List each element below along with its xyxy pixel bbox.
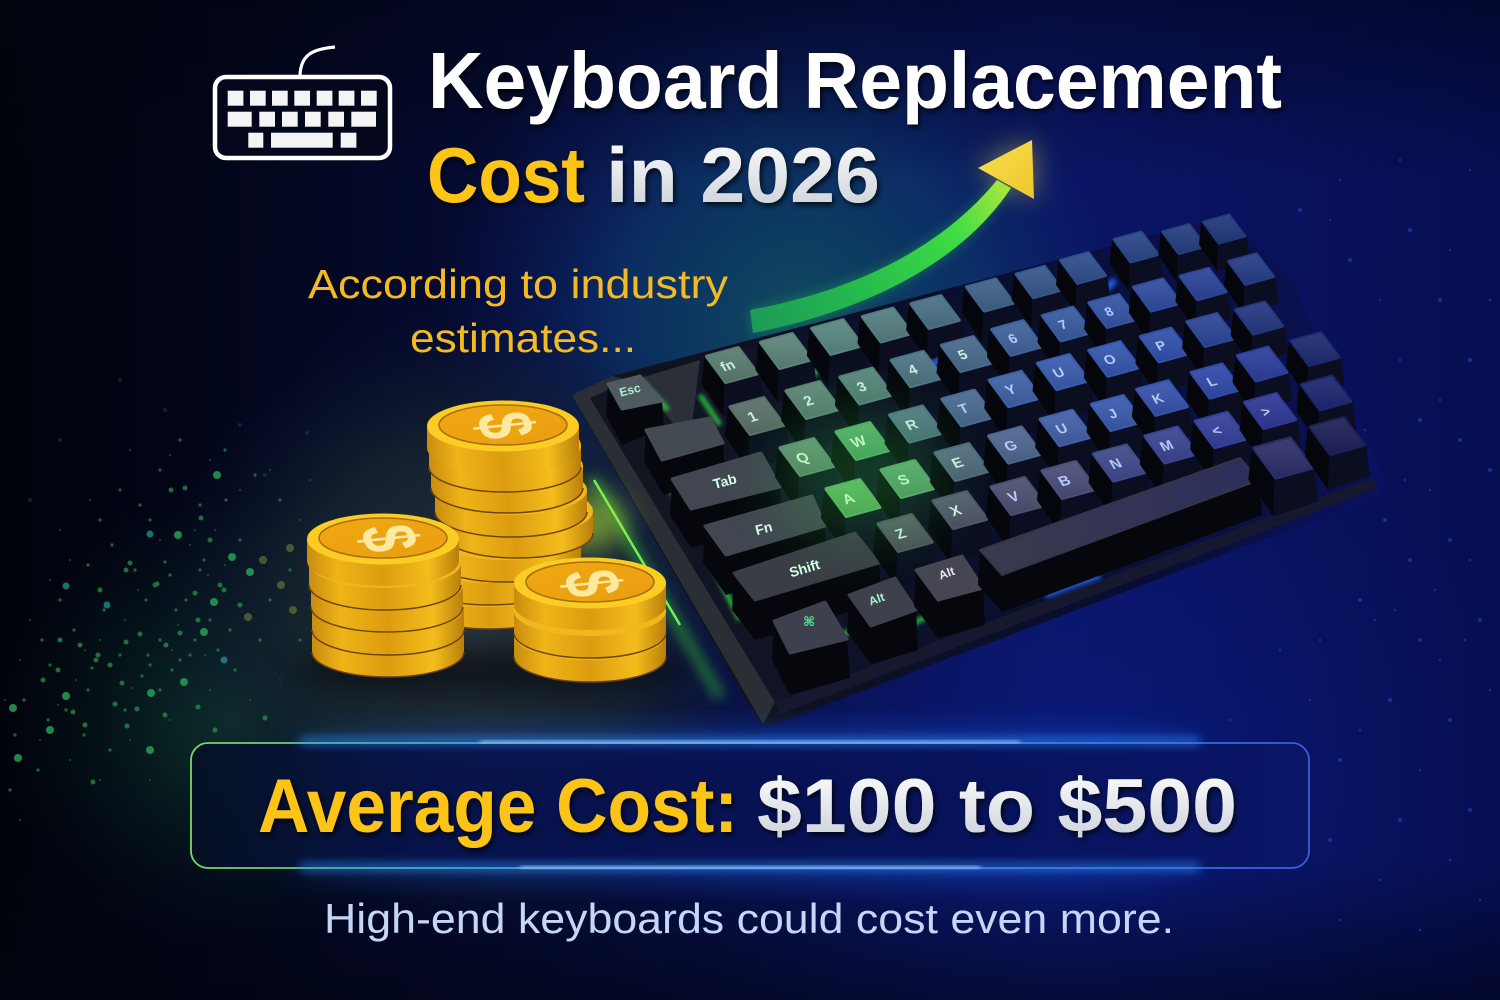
keys: upper letter row: W [848, 434, 871, 451]
coin stack: right [514, 558, 666, 682]
panel: average cost banner [191, 727, 1309, 882]
keys: upper letter row: P [1153, 338, 1169, 353]
keys: lower letter row: N [1107, 456, 1125, 473]
keys: upper letter row [670, 301, 1288, 548]
keys: lower letter row [732, 375, 1356, 640]
keys: home row: L [1203, 373, 1220, 389]
coin stack: left [307, 514, 464, 677]
keys: function row: Esc [618, 381, 642, 400]
average cost value: Average Cost: [258, 764, 738, 849]
subtitle: according to industry estimates: According to industry [308, 261, 729, 307]
keys: lower letter row: Z [893, 526, 909, 543]
keys: number row: 3 [854, 379, 870, 395]
keys: home row: S [895, 472, 913, 489]
average cost value: $100 to $500 [757, 764, 1237, 849]
keys: number row: 4 [905, 362, 921, 378]
keyboard green key glow [775, 410, 945, 540]
keys: bottom row: ⌘ [803, 614, 815, 629]
coin stack: right: $ [546, 566, 639, 601]
keys: home row: A [840, 491, 858, 508]
subtitle: according to industry estimates: estimates... [410, 315, 636, 361]
keys: home row: K [1149, 390, 1167, 407]
coins [290, 400, 690, 692]
keys: number row: 1 [745, 410, 761, 426]
keys: home row: J [1105, 406, 1120, 421]
title: Cost [427, 131, 585, 219]
green particles [5, 440, 310, 820]
keys: number row [644, 253, 1279, 495]
keyboard backlight glow [592, 280, 1115, 697]
title: in 2026 [606, 131, 880, 219]
keys: function row: fn [717, 357, 738, 374]
keys: upper letter row: Y [1002, 382, 1020, 399]
keys: home row: U [1053, 421, 1071, 438]
arrow: rising cost [750, 140, 1034, 333]
coin stack: left: $ [343, 521, 436, 556]
coin stack: middle [414, 400, 593, 629]
keys: lower letter row: < [1209, 423, 1225, 439]
keys: home row [703, 331, 1345, 595]
keys: home row: G [1002, 438, 1021, 455]
icon: keyboard outline [215, 47, 390, 158]
keys: lower letter row: M [1157, 438, 1177, 455]
keys: upper letter row: T [956, 401, 973, 417]
keys: lower letter row: V [1005, 489, 1023, 506]
keys: lower letter row: Shift [787, 556, 822, 580]
keys: number row: 7 [1055, 317, 1070, 332]
keys: number row: 2 [801, 394, 817, 410]
keys: lower letter row: X [947, 503, 965, 520]
keys: home row: E [949, 455, 967, 472]
keyboard [572, 214, 1385, 726]
average cost value [258, 764, 1237, 849]
keys: number row: 8 [1102, 304, 1117, 319]
footnote: High-end keyboards could cost even more. [324, 895, 1174, 942]
keys: function row [606, 214, 1250, 445]
keys: upper letter row: U [1050, 364, 1068, 381]
keys: number row: 6 [1005, 330, 1021, 346]
keys: upper letter row: R [903, 417, 922, 434]
keys: upper letter row: Tab [711, 470, 738, 492]
keys: bottom row [772, 416, 1370, 695]
keys: lower letter row: > [1258, 403, 1274, 419]
keys: lower letter row: B [1056, 473, 1074, 490]
title [427, 36, 1282, 219]
keys: home row: Fn [753, 518, 774, 538]
coin stack: middle: $ [459, 408, 552, 443]
keys: upper letter row: O [1100, 351, 1119, 368]
blue particles [30, 160, 1490, 930]
title: Keyboard Replacement [428, 36, 1282, 125]
keys: bottom row: Alt [867, 590, 887, 609]
keys: upper letter row: Q [793, 450, 813, 467]
keys: bottom row: Alt [937, 564, 957, 583]
subtitle: according to industry estimates [308, 261, 729, 361]
keys: number row: 5 [955, 346, 971, 362]
keyboard base [572, 215, 1385, 726]
